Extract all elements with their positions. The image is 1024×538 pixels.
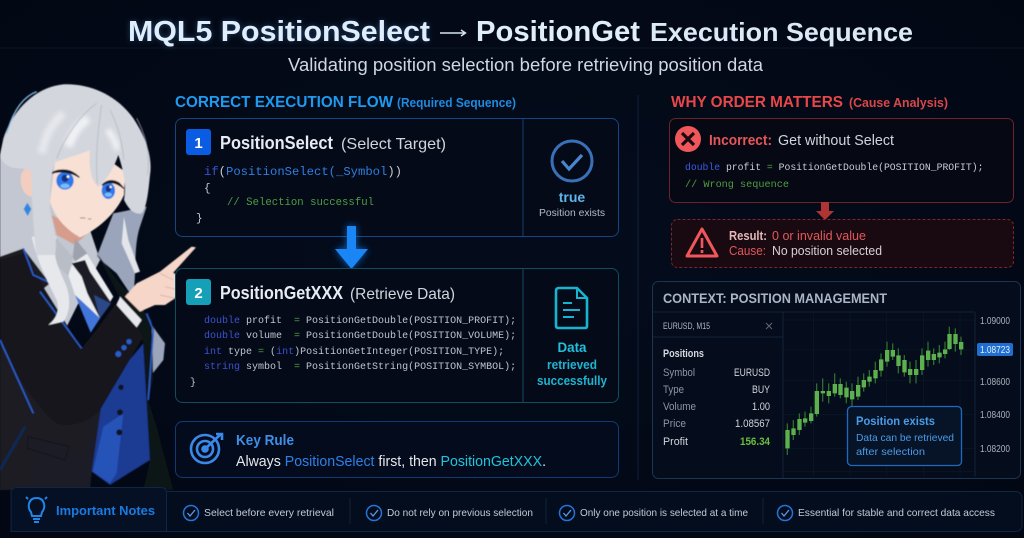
- price axis: 1.08200: [980, 444, 1010, 455]
- step 2 code: double profit = PositionGetDouble(POSITION_PROFIT);: [204, 315, 516, 327]
- note 2: [366, 506, 533, 520]
- data retrieved status: Data: [558, 339, 587, 355]
- key rule text: Always PositionSelect first, then PositionGetXXX.: [236, 454, 546, 470]
- context heading: CONTEXT: POSITION MANAGEMENT: [663, 290, 887, 306]
- icon: light bulb: [26, 497, 47, 522]
- incorrect heading: Get without Select: [778, 132, 895, 149]
- positions table: 156.34: [740, 436, 771, 448]
- data retrieved status: [537, 339, 608, 388]
- step 1 code: // Selection successful: [227, 197, 374, 209]
- sleeve: [0, 253, 143, 425]
- title: MQL5 PositionSelect: [128, 16, 430, 48]
- result text: Result:: [729, 229, 767, 243]
- note 4: Essential for stable and correct data access: [798, 507, 995, 519]
- step 1 code: [196, 165, 402, 225]
- panel: result and cause: [672, 220, 1014, 268]
- incorrect code: double profit = PositionGetDouble(POSITION_PROFIT);: [685, 162, 983, 173]
- step 2 code: double volume = PositionGetDouble(POSITION_VOLUME);: [204, 330, 516, 342]
- callout: position exists: [848, 406, 962, 466]
- face: [50, 147, 125, 237]
- data retrieved status: retrieved: [547, 357, 597, 372]
- shirt and collar: [68, 253, 113, 318]
- positions table: Volume: [663, 401, 696, 413]
- section heading: correct execution flow: [175, 94, 516, 111]
- positions table: EURUSD: [734, 367, 770, 379]
- icon: error cross: [675, 126, 701, 152]
- panel: key rule: [176, 422, 618, 478]
- price axis: [977, 316, 1013, 455]
- icon: target: [191, 434, 222, 463]
- data retrieved status: successfully: [537, 373, 608, 388]
- step 1 heading: PositionSelect: [220, 133, 333, 153]
- note 3: [560, 506, 748, 520]
- panel: step 2 PositionGetXXX: [176, 268, 618, 402]
- step 2 code: int type = (int)PositionGetInteger(POSITION_TYPE);: [204, 346, 504, 358]
- icon: document: [556, 288, 587, 328]
- positions table: Positions: [663, 348, 704, 360]
- step 2 heading: (Retrieve Data): [350, 286, 455, 303]
- step 2 code: }: [190, 377, 196, 389]
- positions table: [663, 321, 772, 448]
- mouth: [80, 217, 91, 220]
- step 2 badge: [186, 279, 211, 305]
- step 1 code: }: [196, 213, 203, 225]
- positions table: 1.08567: [735, 418, 770, 430]
- price axis: 1.09000: [980, 316, 1010, 327]
- price axis: 1.08600: [980, 377, 1010, 388]
- positions table: EURUSD, M15: [663, 321, 710, 331]
- title: [128, 16, 913, 48]
- title: MQL5 PositionSelect: [128, 16, 430, 48]
- title: PositionGet: [476, 16, 640, 48]
- panel: important notes bar: [11, 488, 1022, 532]
- arrow: step 1 to step 2: [335, 226, 368, 269]
- incorrect heading: [709, 132, 895, 149]
- note 3: Only one position is selected at a time: [580, 507, 748, 519]
- step 2 heading: PositionGetXXX: [220, 283, 343, 303]
- subtitle: Validating position selection before retrieving position data: [288, 55, 764, 75]
- positions table: Price: [663, 418, 686, 430]
- positions table: Type: [663, 384, 684, 396]
- step 1 heading: [220, 133, 446, 153]
- section heading: why order matters: [671, 94, 948, 111]
- callout: position exists: Position exists: [856, 414, 935, 428]
- hand: [125, 247, 196, 312]
- result text: No position selected: [772, 244, 882, 258]
- cuff: [117, 297, 142, 327]
- arrow: incorrect to result: [816, 202, 834, 220]
- callout: position exists: after selection: [856, 446, 925, 458]
- step 1 code: if(PositionSelect(_Symbol)): [204, 165, 402, 179]
- key rule text: Key Rule: [236, 433, 294, 449]
- long front strand: [32, 237, 69, 325]
- incorrect code: // Wrong sequence: [685, 179, 789, 191]
- section heading: correct execution flow: CORRECT EXECUTION FLOW: [175, 94, 394, 111]
- step 2 badge: 2: [194, 285, 203, 302]
- result text: [729, 229, 882, 258]
- key rule text: [236, 433, 546, 470]
- panel: step 1 PositionSelect: [176, 118, 618, 236]
- note 1: [184, 506, 334, 520]
- positions table: Profit: [663, 436, 688, 448]
- panel: incorrect usage: [670, 118, 1014, 202]
- price axis: 1.08723: [980, 345, 1010, 356]
- price axis: 1.08400: [980, 410, 1010, 421]
- important notes label: Important Notes: [56, 503, 155, 518]
- back hair: [0, 84, 100, 393]
- section heading: why order matters: (Cause Analysis): [849, 96, 948, 110]
- callout: position exists: Data can be retrieved: [856, 432, 954, 444]
- jacket: [97, 253, 173, 490]
- true status: true: [559, 189, 585, 205]
- step 1 badge: 1: [194, 135, 203, 152]
- jacket buttons: [115, 339, 132, 435]
- incorrect code: [685, 162, 983, 191]
- panel: context position management: [652, 282, 1020, 478]
- eyes: [50, 170, 124, 199]
- step 2 heading: [220, 283, 455, 303]
- ear and earring: [21, 169, 32, 216]
- title: Execution Sequence: [650, 17, 913, 47]
- front hair: [0, 84, 151, 255]
- incorrect heading: Incorrect:: [709, 133, 772, 149]
- positions table: Symbol: [663, 367, 695, 379]
- result text: Cause:: [729, 244, 766, 258]
- step 1 badge: [186, 129, 211, 155]
- step 1 heading: (Select Target): [341, 136, 446, 153]
- positions table: BUY: [752, 384, 771, 396]
- true status: Position exists: [539, 207, 605, 219]
- step 2 code: [190, 315, 516, 389]
- true status: [539, 189, 605, 219]
- neck: [52, 215, 87, 245]
- step 1 code: {: [204, 183, 211, 195]
- icon: check circle: [552, 141, 592, 181]
- result text: 0 or invalid value: [772, 229, 866, 243]
- tie: [72, 260, 112, 318]
- character: anime presenter pointing at the flow: [0, 84, 196, 490]
- section heading: correct execution flow: (Required Sequence): [397, 96, 516, 110]
- note 1: Select before every retrieval: [204, 507, 334, 519]
- positions table: 1.00: [752, 401, 770, 413]
- section heading: why order matters: WHY ORDER MATTERS: [671, 94, 843, 111]
- step 2 code: string symbol = PositionGetString(POSITION_SYMBOL);: [204, 361, 516, 373]
- hair highlights: [7, 92, 148, 183]
- candlestick chart: [783, 312, 975, 477]
- icon: warning triangle: [687, 229, 717, 256]
- vest: [75, 295, 100, 333]
- note 2: Do not rely on previous selection: [387, 507, 533, 519]
